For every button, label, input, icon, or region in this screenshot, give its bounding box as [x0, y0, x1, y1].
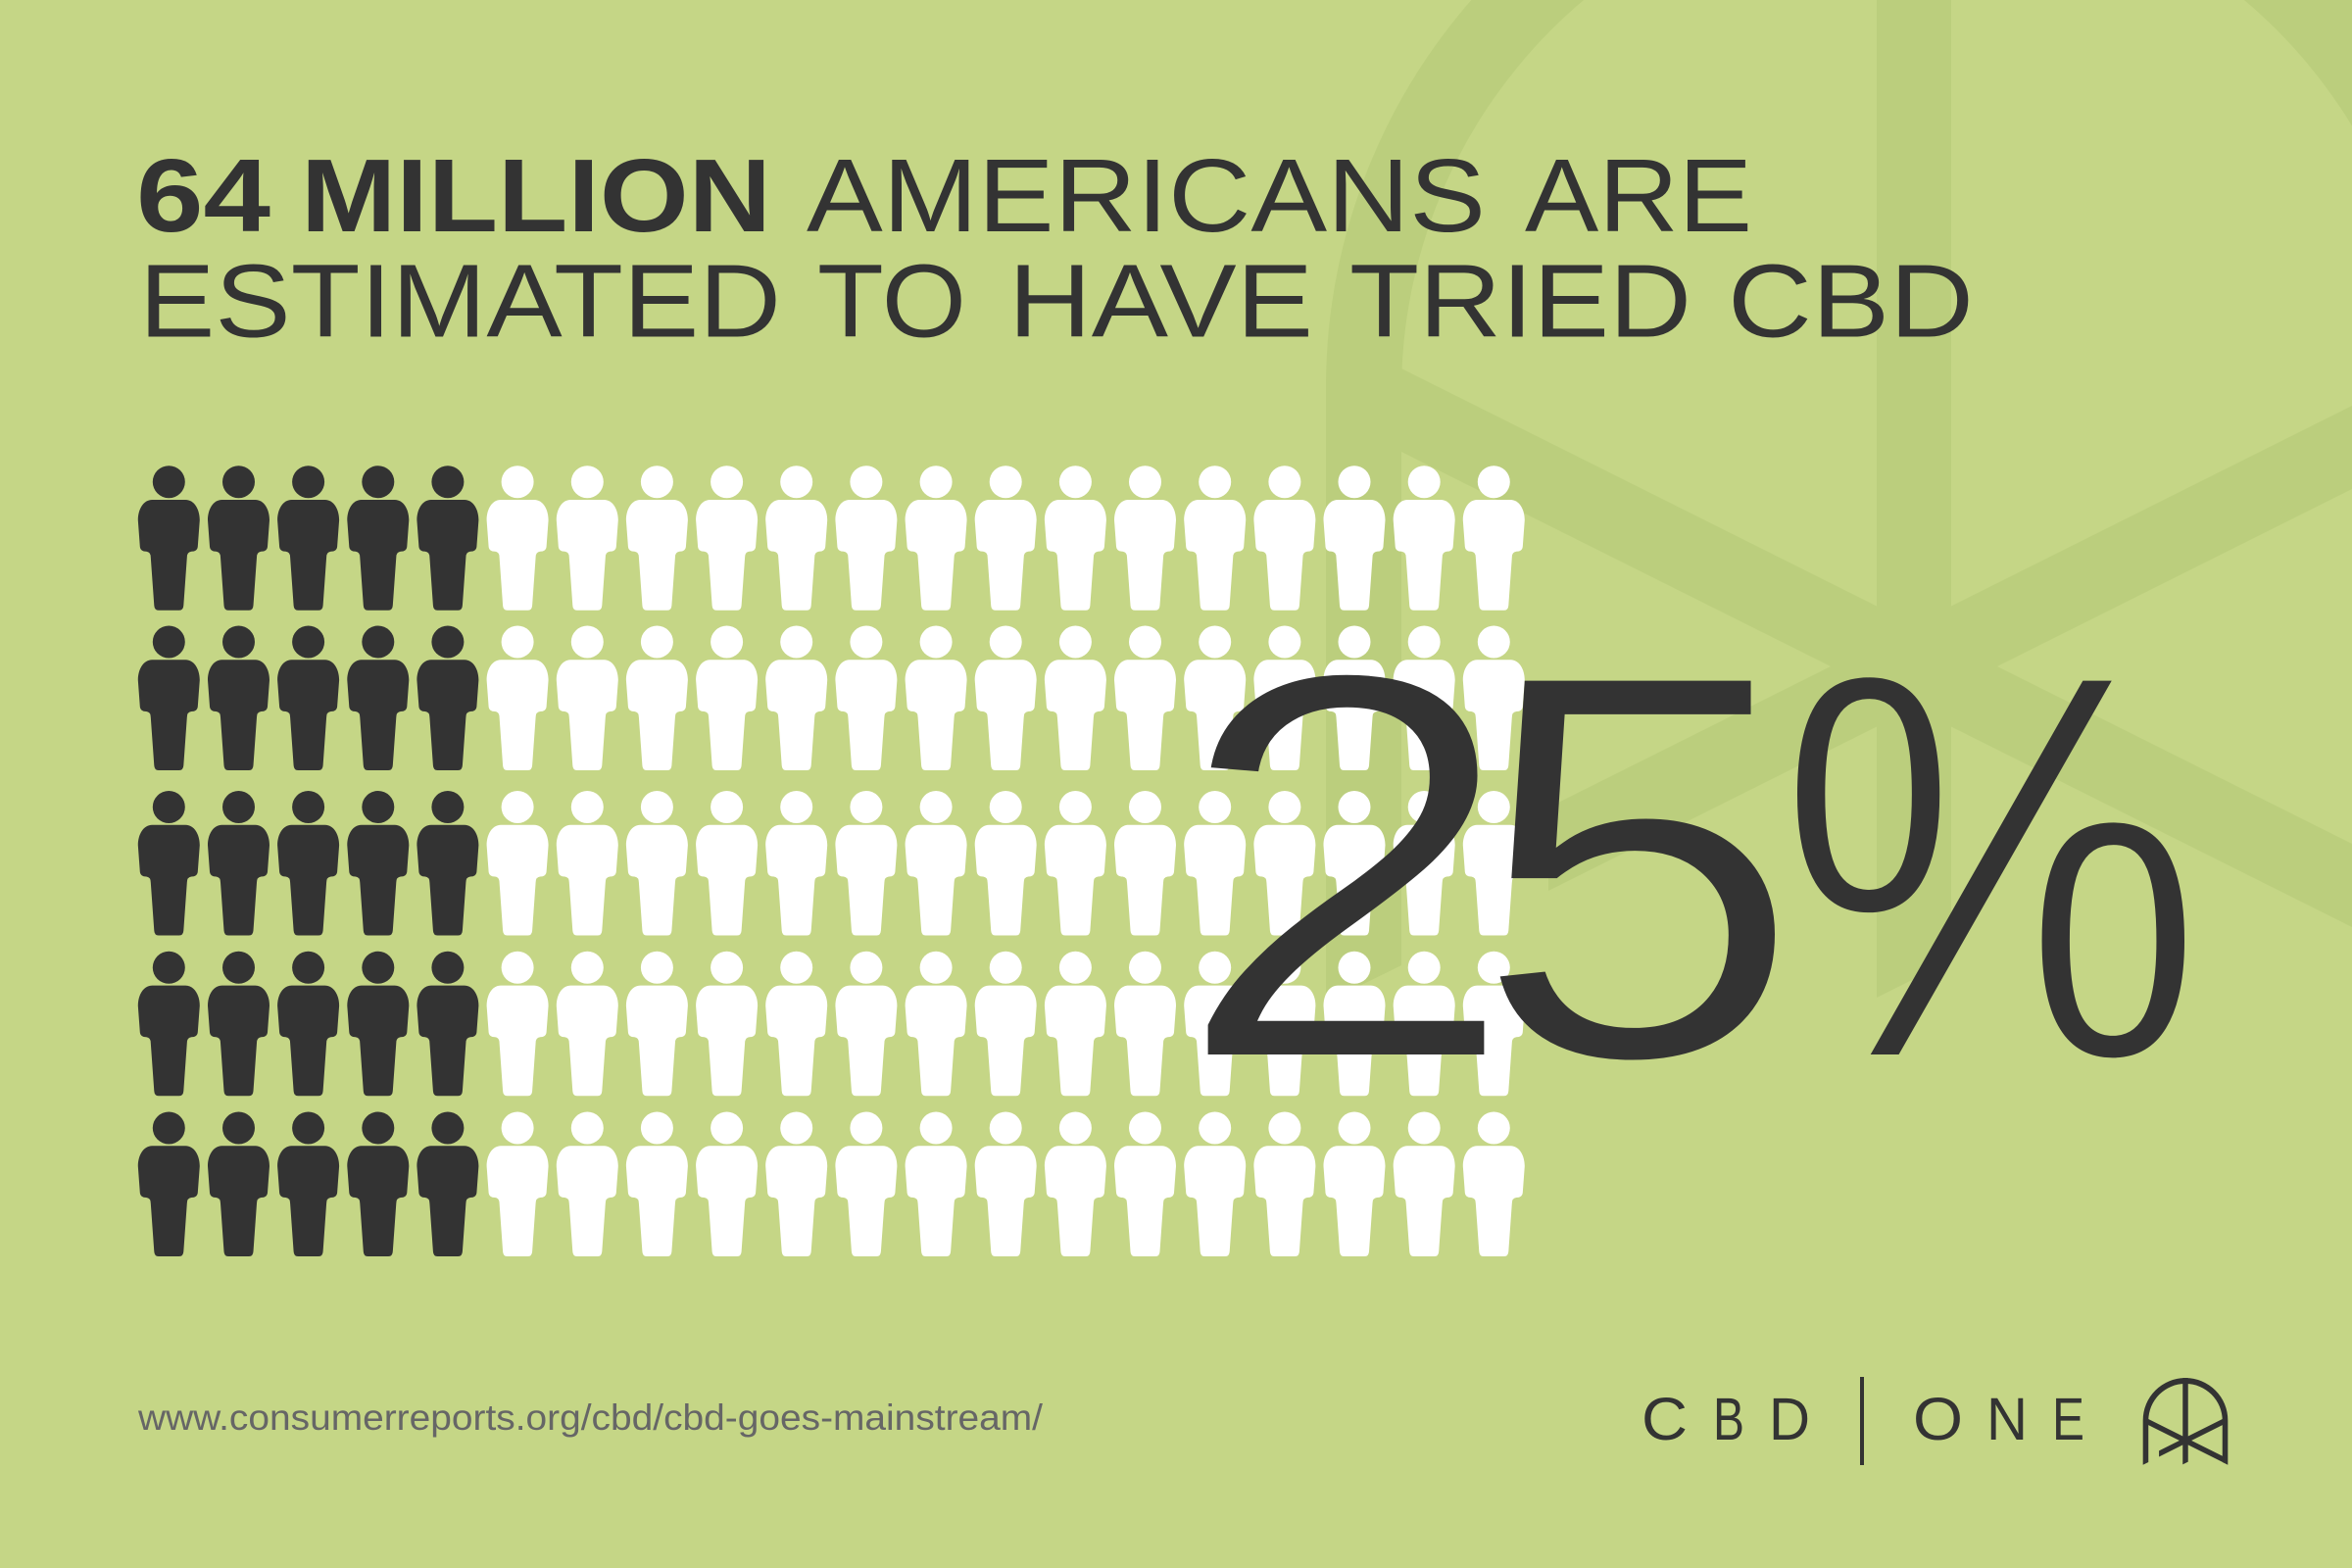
big number: 25%: 2	[1172, 557, 1520, 1176]
brand wordmark: CBD | ONE: N	[1986, 1386, 2028, 1452]
title: MILLION	[301, 138, 771, 254]
title: ARE	[1525, 138, 1752, 254]
brand wordmark: CBD | ONE: D	[1769, 1386, 1810, 1452]
big number: 25%	[1207, 674, 2184, 1060]
title: TO	[817, 243, 966, 359]
brand wordmark: CBD | ONE: C	[1642, 1386, 1688, 1452]
big number: 25%: 5	[1471, 557, 1804, 1176]
title: HAVE	[1008, 243, 1313, 359]
big number: 25%: %	[1777, 557, 2205, 1176]
title: ESTIMATED	[139, 243, 781, 359]
source link: www.consumerreports.org/cbd/cbd-goes-mainstream/	[137, 1397, 1044, 1438]
brand wordmark: CBD | ONE: E	[2052, 1386, 2084, 1452]
icon: CBD One arch logo	[2143, 1378, 2228, 1465]
title: TRIED	[1349, 243, 1691, 359]
brand wordmark: CBD | ONE: O	[1913, 1386, 1963, 1452]
title	[136, 138, 1974, 359]
watermark: large arch logo	[1326, 0, 2352, 1003]
title: CBD	[1728, 243, 1974, 359]
pictogram: 100 people, 25 highlighted	[138, 466, 1525, 1256]
title: 64	[136, 138, 270, 254]
brand wordmark: CBD | ONE	[1642, 1377, 2084, 1465]
title: AMERICANS	[807, 138, 1486, 254]
brand wordmark: CBD | ONE: B	[1713, 1386, 1744, 1452]
